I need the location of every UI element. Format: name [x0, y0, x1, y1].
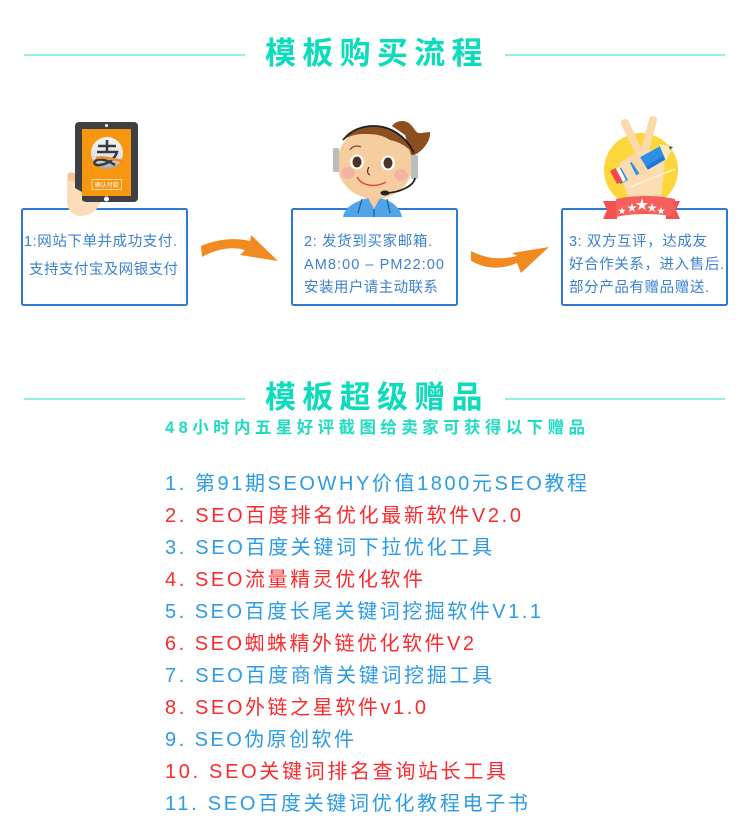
text: step 3 description: 好合作关系，进入售后. — [569, 256, 724, 273]
panel: step 3 — [562, 120, 727, 305]
heading: purchase process: 模板购买流程 — [265, 36, 489, 71]
list: gift items: 10. SEO关键词排名查询站长工具 — [165, 760, 509, 783]
list: gift items: 7. SEO百度商情关键词挖掘工具 — [165, 664, 495, 687]
text: step 2 description: AM8:00 – PM22:00 — [304, 257, 444, 273]
list: gift items: 11. SEO百度关键词优化教程电子书 — [165, 792, 531, 815]
subheading: gift condition: 48小时内五星好评截图给卖家可获得以下赠品 — [165, 417, 585, 437]
text: step 2 description: 安装用户请主动联系 — [304, 279, 438, 296]
list: gift items: 5. SEO百度长尾关键词挖掘软件V1.1 — [165, 600, 544, 623]
text: step 3 description: 3: 双方互评，达成友 — [569, 233, 707, 250]
list: gift items: 1. 第91期SEOWHY价值1800元SEO教程 — [165, 472, 590, 495]
list: gift items: 9. SEO伪原创软件 — [165, 728, 357, 751]
arrow: step 1 to step 2 — [201, 235, 278, 261]
icon: tablet with Alipay — [67, 122, 138, 216]
text: step 1 description — [24, 233, 178, 278]
text: step 3 description — [569, 233, 724, 296]
list: gift items: 8. SEO外链之星软件v1.0 — [165, 696, 429, 719]
icon: tablet with Alipay: 确认付款 — [95, 181, 119, 189]
panel: step 1 — [22, 122, 187, 305]
text: step 1 description: 1:网站下单并成功支付. — [24, 233, 177, 250]
heading: super gifts: 模板超级赠品 — [265, 380, 489, 415]
text: step 3 description: 部分产品有赠品赠送. — [569, 279, 709, 296]
icon: customer service agent — [333, 121, 430, 217]
list: gift items: 4. SEO流量精灵优化软件 — [165, 568, 426, 591]
icon: victory hand with pencil badge — [603, 120, 680, 219]
list: gift items — [165, 472, 590, 815]
text: step 1 description: 支持支付宝及网银支付 — [29, 261, 178, 278]
list: gift items: 6. SEO蜘蛛精外链优化软件V2 — [165, 632, 477, 655]
arrow: step 2 to step 3 — [471, 247, 549, 273]
text: step 2 description: 2: 发货到买家邮箱. — [304, 233, 432, 250]
list: gift items: 3. SEO百度关键词下拉优化工具 — [165, 536, 495, 559]
text: step 2 description — [304, 233, 444, 296]
list: gift items: 2. SEO百度排名优化最新软件V2.0 — [165, 504, 524, 527]
panel: step 2 — [292, 121, 457, 305]
